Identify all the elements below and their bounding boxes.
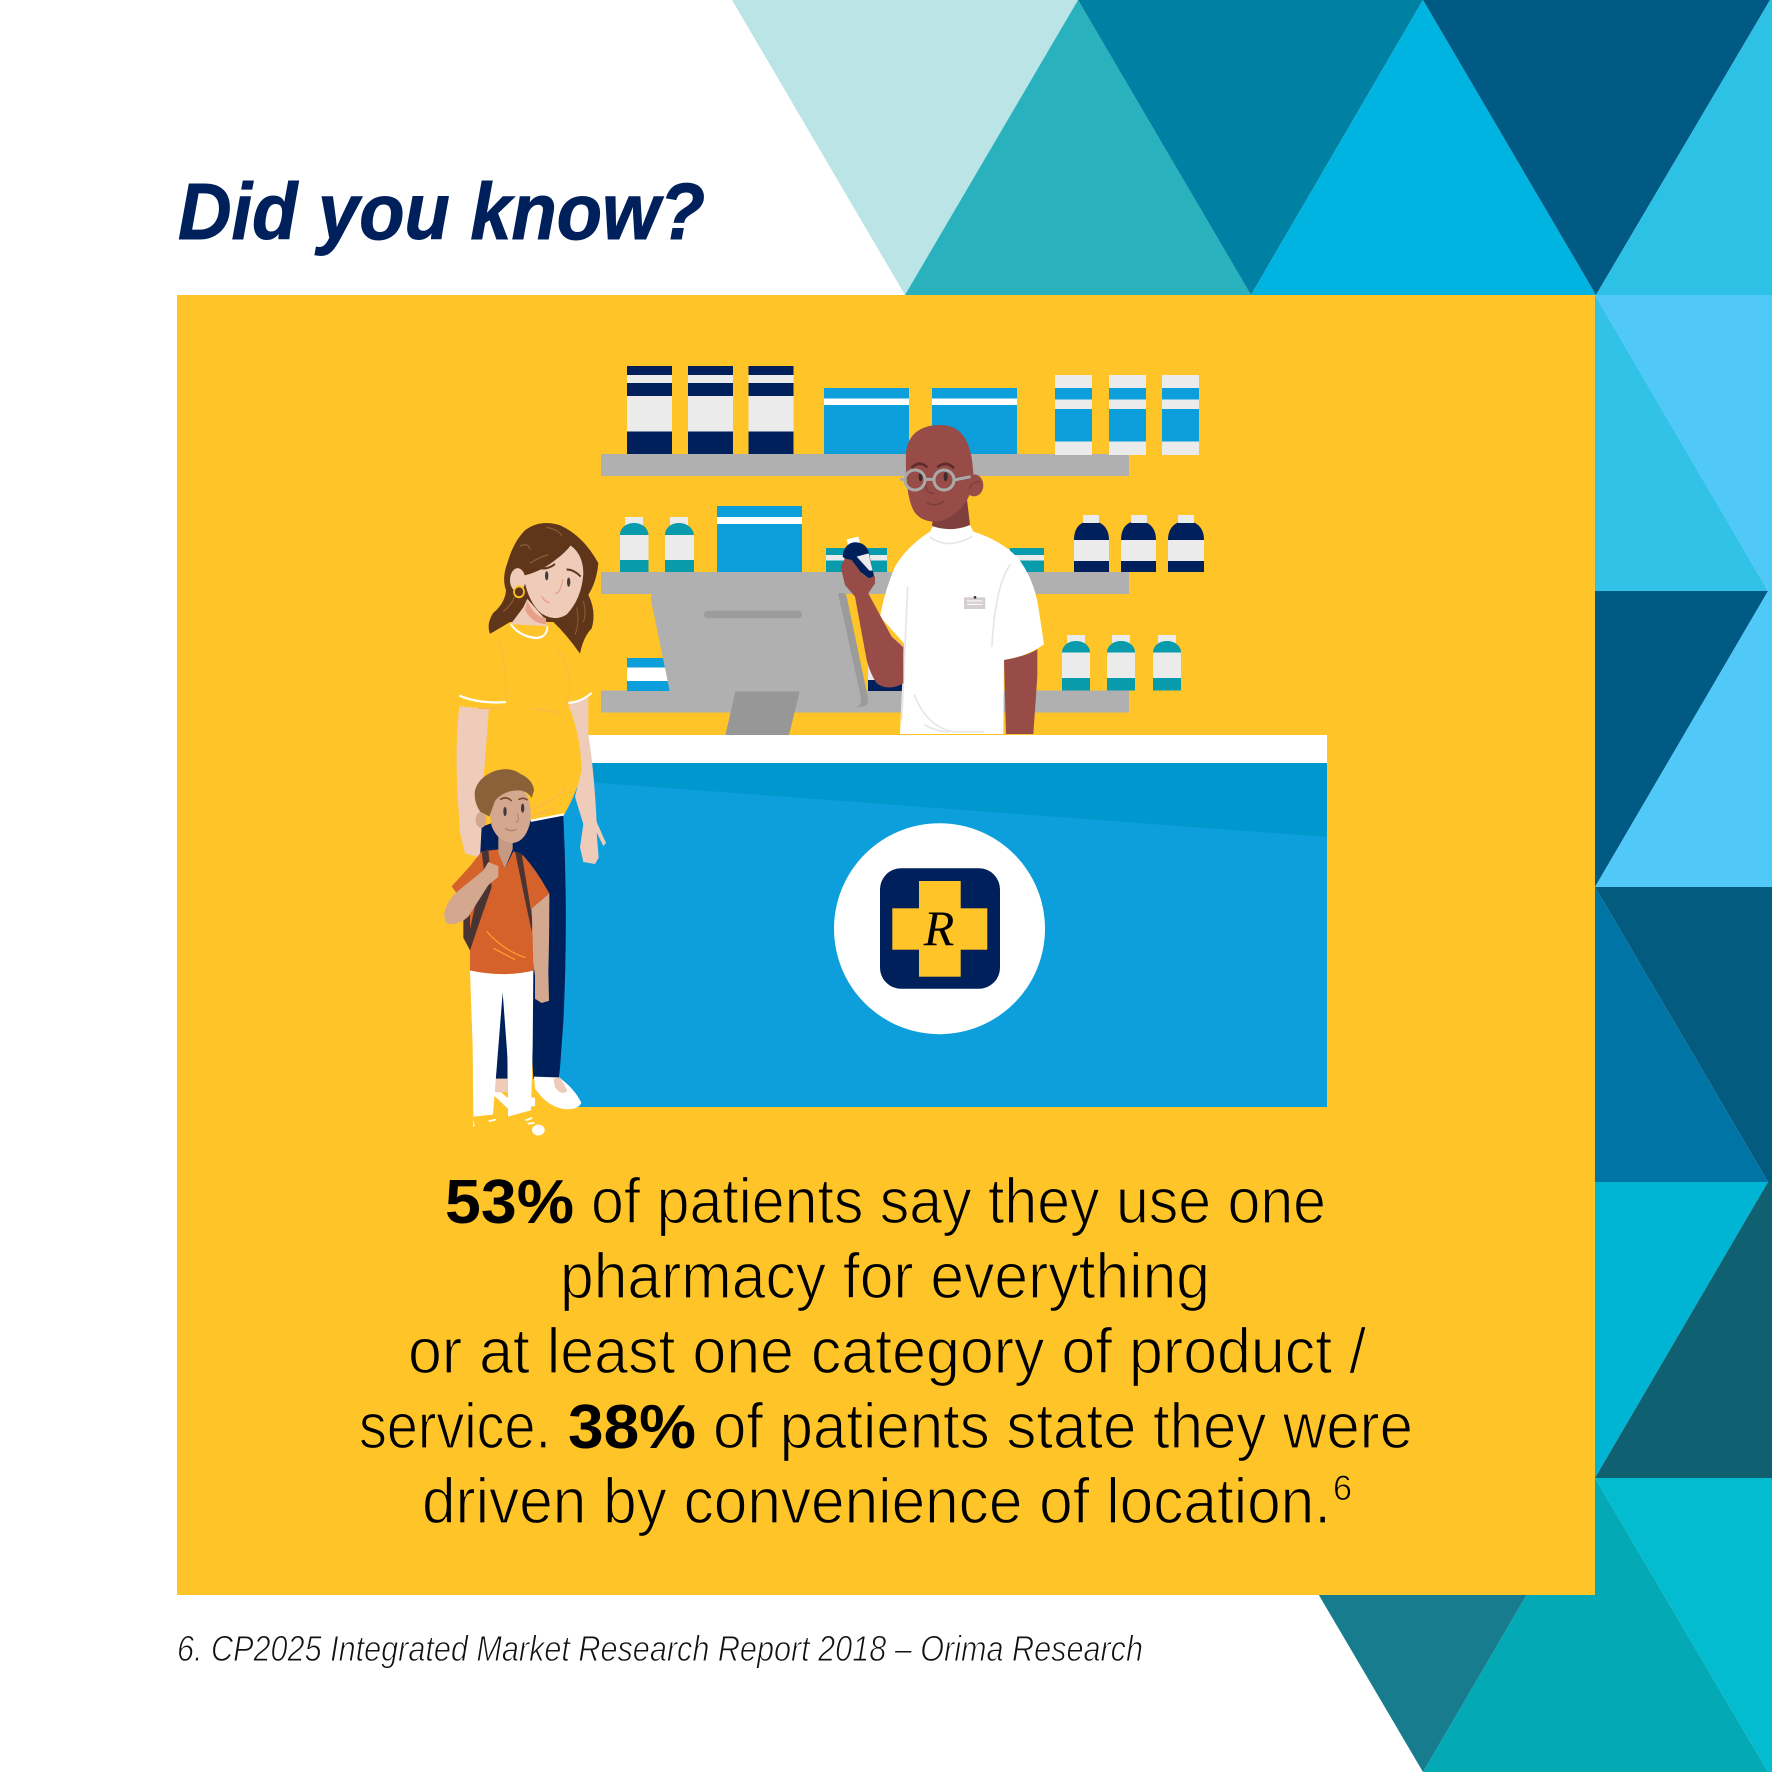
arm holding bottle: [841, 537, 904, 687]
line 4: of patients state they were: [713, 1390, 1413, 1462]
pharmacist: [841, 425, 1044, 734]
line 5: 6: [1333, 1469, 1352, 1508]
lower shelf products: [627, 635, 1181, 691]
arm right: [1004, 649, 1037, 734]
dress details: [459, 624, 592, 821]
mother neck and face: [510, 545, 583, 637]
mother arms: [457, 698, 606, 864]
pharmacy logo: [834, 823, 1045, 1034]
footnote: 6. CP2025 Integrated Market Research Report 2018 – Orima Research: [177, 1628, 1143, 1669]
line 4: [359, 1390, 1413, 1462]
hair strands: [503, 527, 585, 635]
shirt: [880, 525, 1044, 734]
pharmacy logo: R: [923, 900, 954, 956]
child head: [475, 769, 534, 868]
body text: [359, 1165, 1413, 1537]
neck: [932, 497, 970, 529]
line 1: of patients say they use one: [591, 1165, 1326, 1237]
triangle pattern: top and right border: [732, 0, 1772, 1772]
line 4: 38%: [568, 1393, 696, 1462]
child shirt: [452, 849, 549, 974]
line 4: service.: [359, 1390, 551, 1462]
pharmacy counter: [560, 735, 1327, 1107]
line 1: 53%: [445, 1168, 574, 1237]
child trousers: [470, 971, 533, 1117]
mother dress: [459, 624, 592, 821]
top shelf products: [627, 366, 1199, 455]
child: [444, 769, 549, 1136]
mother trousers: [477, 816, 566, 1079]
child arms: [444, 862, 549, 1003]
glasses: [900, 470, 971, 490]
computer monitor: [651, 593, 868, 735]
title: Did you know?: [178, 167, 705, 256]
illustration: pharmacy scene: [444, 366, 1327, 1136]
line 2: pharmacy for everything: [560, 1240, 1210, 1312]
mother: [457, 523, 606, 1109]
head: [900, 425, 983, 522]
panel: yellow background: [177, 295, 1595, 1595]
mother hair: [489, 523, 598, 654]
mother shoes: [493, 1077, 581, 1109]
line 5: driven by convenience of location.: [422, 1465, 1331, 1537]
backpack: [463, 904, 482, 950]
shirt fold lines: [902, 537, 1010, 732]
name badge: [964, 596, 985, 609]
middle shelf products: [620, 506, 1204, 572]
shelves: [601, 454, 1129, 712]
child shoe: [473, 1117, 545, 1136]
line 3: or at least one category of product /: [408, 1315, 1366, 1387]
backpack straps: [470, 849, 533, 950]
